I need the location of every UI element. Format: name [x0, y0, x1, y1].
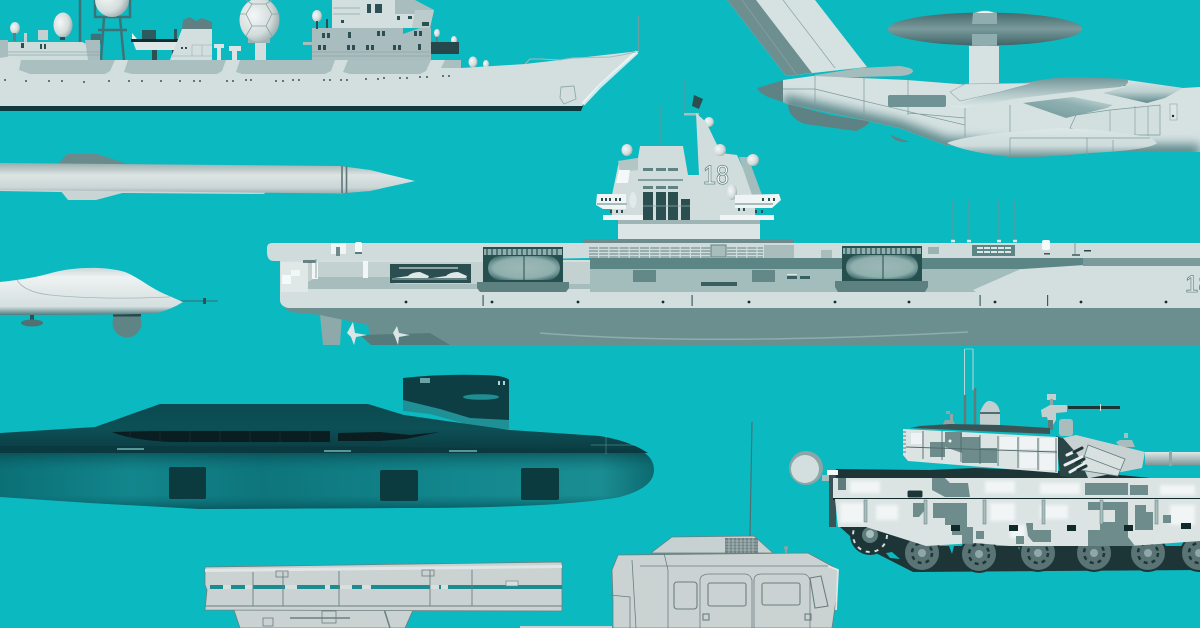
- carrier: island base: [583, 220, 794, 243]
- carrier: rudder: [320, 315, 342, 345]
- ship: tower radome: [95, 0, 129, 17]
- tank: commander cupola: [941, 401, 1135, 447]
- ship: main superstructure: [303, 0, 434, 60]
- carrier: island bridge windows: [638, 168, 690, 220]
- sub: sail: [403, 375, 509, 429]
- carrier: island radomes: [622, 144, 759, 208]
- ship: waterline: [0, 106, 583, 111]
- truck: roof: [651, 536, 788, 554]
- plane: rotodome: [888, 10, 1082, 46]
- ship: portholes: [4, 75, 450, 83]
- carrier: lower hull: [283, 306, 1200, 345]
- carrier: propellers: [347, 322, 410, 345]
- drone: [0, 268, 218, 338]
- drone: nose probe: [180, 298, 218, 304]
- launcher: mount: [234, 609, 413, 628]
- sub: hull darkline: [0, 446, 648, 453]
- tank: gun barrel: [1145, 451, 1200, 466]
- ship: lifeboat: [131, 29, 183, 60]
- plane: belly fairing: [788, 104, 869, 131]
- drone: fuselage: [0, 268, 183, 315]
- plane: rotodome pylon: [969, 46, 999, 86]
- tank: turret neck shadow: [1056, 436, 1095, 480]
- cruise missile: [0, 154, 415, 200]
- carrier: hull side: [280, 260, 1200, 308]
- drone: main wheel: [112, 308, 142, 338]
- sub: lower hull: [0, 450, 654, 509]
- carrier: prop shaft strip: [360, 333, 450, 345]
- carrier: island platforms: [596, 194, 781, 220]
- missile launcher truck: [205, 422, 838, 628]
- ship: hull panels: [19, 60, 461, 74]
- truck: mirror: [828, 566, 838, 610]
- plane: tail fin: [727, 0, 867, 76]
- carrier: side gallery: [590, 258, 1200, 292]
- carrier: deck gallery slats: [589, 245, 794, 258]
- plane: fuselage panel lines: [783, 76, 1010, 137]
- tank: machine gun: [1041, 394, 1120, 436]
- tank: deck shadow: [833, 468, 1200, 488]
- carrier: stern details: [281, 242, 368, 292]
- carrier: island side shading: [739, 157, 762, 195]
- destroyer ship: [0, 0, 639, 111]
- carrier: right deck details: [821, 240, 1091, 258]
- sub: lower hull shading: [0, 452, 654, 509]
- carrier: island mast head: [684, 95, 714, 127]
- tank: antenna masts: [965, 388, 975, 428]
- sub: upper deck: [0, 404, 648, 453]
- launcher: rocket pods: [205, 562, 562, 611]
- carrier: island tower: [612, 113, 755, 220]
- drone: nose wheel: [21, 314, 43, 326]
- tank: whip antennas: [964, 349, 973, 420]
- tank: hull band: [833, 478, 1200, 498]
- sub: missile hatch rows: [112, 431, 440, 442]
- missile: bottom fin: [60, 190, 130, 200]
- plane: engine: [1070, 104, 1177, 136]
- drone: canopy line: [17, 280, 170, 298]
- ship: dark deck block: [431, 42, 459, 54]
- carrier: flight deck: [267, 243, 1200, 261]
- carrier: keel highlight: [540, 332, 968, 339]
- plane: main wing: [950, 77, 1183, 118]
- ship: hull outline panel: [560, 86, 576, 104]
- sub: deck markings: [117, 435, 635, 454]
- tank: sprocket wheel: [850, 515, 890, 555]
- missile: top fin: [55, 154, 137, 167]
- tank: track: [840, 527, 1200, 572]
- missile: body: [0, 163, 415, 194]
- tank: turret front wedge: [1063, 435, 1145, 478]
- ship: mast on bow: [638, 16, 640, 52]
- truck: windows: [674, 576, 828, 620]
- tank: searchlight: [789, 451, 834, 485]
- carrier: elevator left: [477, 247, 569, 292]
- tank: rear plate: [829, 470, 836, 527]
- plane: lower engine pod: [947, 128, 1157, 157]
- tank: smoke launchers: [1065, 448, 1086, 472]
- truck: cab: [612, 553, 838, 628]
- submarine: [0, 375, 654, 509]
- truck: cab panel lines: [610, 553, 830, 628]
- plane: tail pod: [812, 66, 913, 78]
- truck: chassis deck: [520, 626, 612, 628]
- ship: bow railing: [525, 52, 636, 64]
- ship: left superstructure: [0, 30, 100, 60]
- tank: hull divider: [833, 498, 1200, 500]
- truck: whip antenna: [750, 422, 752, 536]
- carrier: island number 18: 18: [703, 160, 729, 190]
- missile: warhead bands: [342, 166, 346, 193]
- carrier: island white panel: [616, 170, 630, 183]
- tank: turret roof clutter: [910, 424, 1050, 434]
- plane: side window panel: [888, 95, 946, 107]
- ship: hull: [0, 51, 639, 107]
- ship: small radomes: [10, 12, 489, 68]
- tank: track teal gaps: [886, 546, 1025, 559]
- ship: deck fittings: [214, 44, 241, 60]
- carrier: hull markers: [405, 295, 1167, 306]
- AWACS aircraft: [727, 0, 1200, 157]
- tank: [789, 349, 1200, 572]
- tank: turret body: [903, 429, 1058, 473]
- ship: bow highlight: [583, 52, 637, 104]
- carrier: deck masts: [951, 200, 1017, 241]
- ship: spherical radome: [240, 0, 280, 60]
- carrier: island antennas: [661, 80, 685, 146]
- tank: road wheels: [904, 535, 1200, 572]
- ship: funnel: [170, 17, 212, 60]
- carrier: mid side shading: [300, 262, 600, 284]
- carrier: helicopter bay: [390, 264, 471, 283]
- tank: side skirt: [835, 499, 1200, 549]
- plane: fuselage: [783, 76, 1200, 152]
- missile: lower strip: [0, 189, 268, 194]
- aircraft carrier: [267, 80, 1200, 345]
- ship: radar tower frame: [80, 0, 130, 60]
- plane: tail cone: [757, 80, 784, 102]
- carrier: elevator right: [835, 246, 928, 292]
- sub: hatches: [169, 467, 559, 501]
